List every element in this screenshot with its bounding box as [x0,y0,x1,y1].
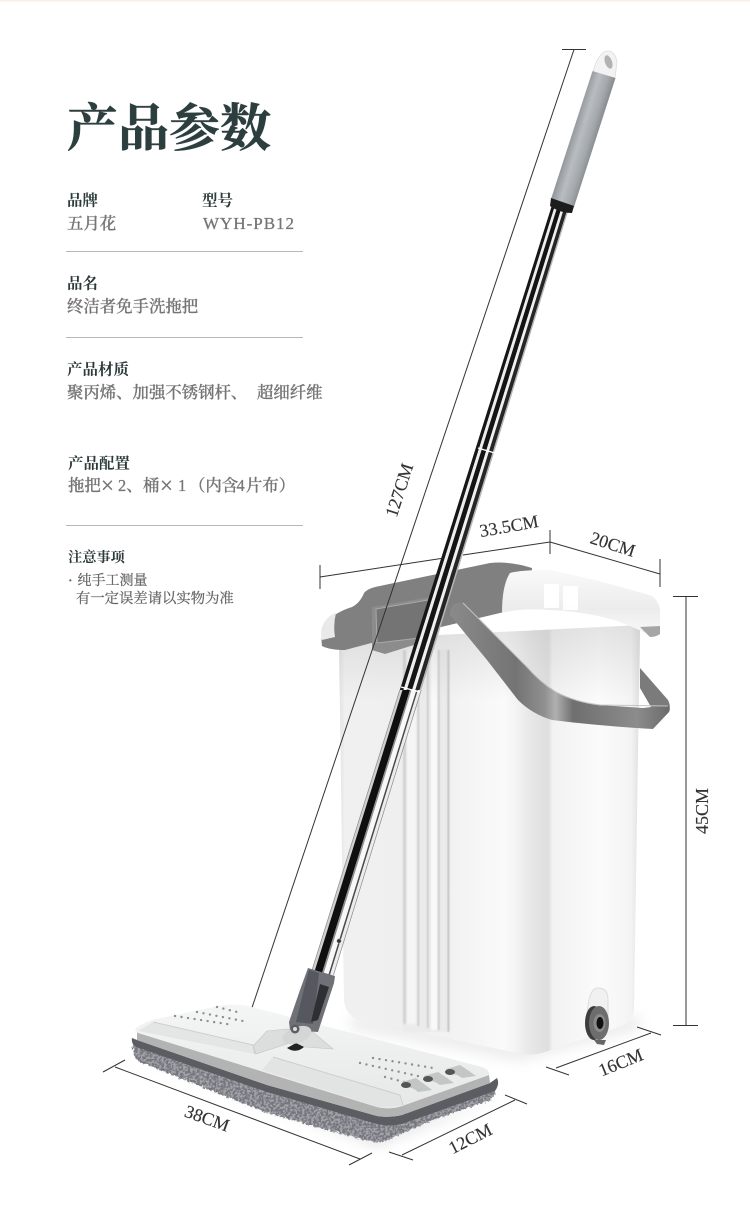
spec: brand and model: 品牌 [67,192,99,210]
notes: · [68,574,73,589]
bucket under-lid shading [339,625,640,700]
spec: brand and model: 型号 [202,192,234,210]
plate holes right [360,1058,433,1084]
bucket [321,563,670,1062]
spec: configuration: （内含 [189,476,238,495]
handle loop [593,51,617,78]
spec: configuration: 桶 [143,476,159,495]
lid grey part [322,563,532,650]
spec: material: 产品材质 [67,360,130,378]
microfibre pad [133,1045,495,1142]
mop plate [135,1004,490,1117]
mop pad [132,1038,500,1148]
bucket floor shadow [350,1015,640,1062]
grip collar [550,198,574,213]
dimension: bucket width 20CM: 20CM [588,528,638,561]
dimension: bucket length 33.5CM [320,511,550,589]
spec: material: 聚丙烯、加强不锈钢杆、 [67,383,247,402]
title: 产品参数 [67,87,271,161]
dimension: mop length 38CM: 38CM [182,1101,232,1136]
pad top edge [132,1038,498,1126]
mop pole [310,205,570,975]
plate holes left [175,1007,248,1025]
lid highlight [544,584,559,608]
spec: configuration: × [101,473,114,498]
pole collars [401,448,498,692]
spec: configuration: × [160,473,173,498]
dimension: height of mop 127CM: 127CM [381,461,417,519]
lower pole section [310,690,421,975]
mop joint [280,968,335,1051]
spec: brand and model: 五月花 [67,214,116,233]
dimension: mop width 12CM: 12CM [445,1119,495,1158]
dimension: bucket length 33.5CM: 33.5CM [478,511,540,541]
spec: product name: 终洁者免手洗拖把 [67,297,198,316]
spec: brand and model: WYH-PB12 [203,214,295,233]
pole rivet [337,939,341,943]
lid light left corner [321,613,336,640]
spec: configuration: 产品配置 [68,454,131,472]
dimension: mop length 38CM [103,1060,372,1165]
grip sleeve [551,71,616,207]
spec: configuration: 片布） [246,476,295,495]
notes: 纯手工测量 [78,573,148,589]
plate clips [401,1065,476,1092]
spec: configuration: 拖把 [68,476,101,495]
dimension: bucket base 16CM [546,1027,661,1080]
mop grip [550,51,617,213]
plate top [135,1004,489,1108]
plate side strip [137,1032,490,1117]
spec: product name [67,274,198,316]
top edge band [0,0,750,2]
spec: brand and model [67,192,295,233]
dimension: bucket base 16CM: 16CM [596,1045,646,1080]
spec: configuration [68,454,295,498]
bucket body [339,625,640,1054]
bucket back handle [640,668,670,714]
spec: configuration: 4 [236,476,245,495]
spec: configuration: 1 [178,476,186,495]
lid latch [372,597,430,654]
dimension: bucket height 45CM: 45CM [692,788,712,834]
bucket front handle [450,602,670,729]
notes: 有一定误差请以实物为准 [76,589,234,607]
drain plug [585,988,609,1045]
dimension: bucket width 20CM [550,528,660,587]
spec: material: 超细纤维 [257,383,323,402]
upper pole section [400,205,570,690]
notes [68,549,234,607]
notes: 注意事项 [68,549,126,566]
spec: material [67,360,323,402]
spec: configuration: 2、 [118,476,143,495]
lid white corner [502,570,660,635]
bucket ribs [403,650,449,1032]
dimension: mop width 12CM [389,1095,527,1160]
lid underside edge [640,626,660,637]
mop floor shadow [135,1055,500,1148]
spec: product name: 品名 [67,274,98,292]
plate swivel cross [253,1029,333,1054]
